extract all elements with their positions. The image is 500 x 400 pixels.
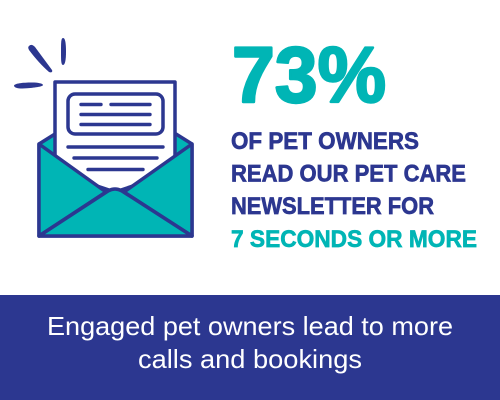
bottom banner (0, 295, 500, 400)
newsletter page (55, 82, 175, 192)
icon: burst lines (14, 38, 66, 89)
banner background (0, 295, 500, 400)
envelope front flap (39, 189, 192, 236)
envelope back (39, 134, 192, 236)
newsletter text lines (68, 104, 163, 170)
line 2: READ OUR PET CARE (231, 160, 466, 188)
banner text line 2: calls and bookings (138, 344, 362, 374)
newsletter header box (68, 94, 163, 134)
statistic description (231, 128, 477, 253)
banner text line 1: Engaged pet owners lead to more (47, 311, 453, 341)
line 1: OF PET OWNERS (231, 128, 419, 155)
big statistic: 73%: 73% (232, 30, 386, 119)
envelope right flap (124, 144, 192, 236)
line 4: highlight: 7 SECONDS OR MORE (231, 226, 477, 253)
icon: open envelope with newsletter (14, 38, 192, 236)
envelope left flap (39, 144, 106, 236)
line 3: NEWSLETTER FOR (231, 193, 434, 220)
